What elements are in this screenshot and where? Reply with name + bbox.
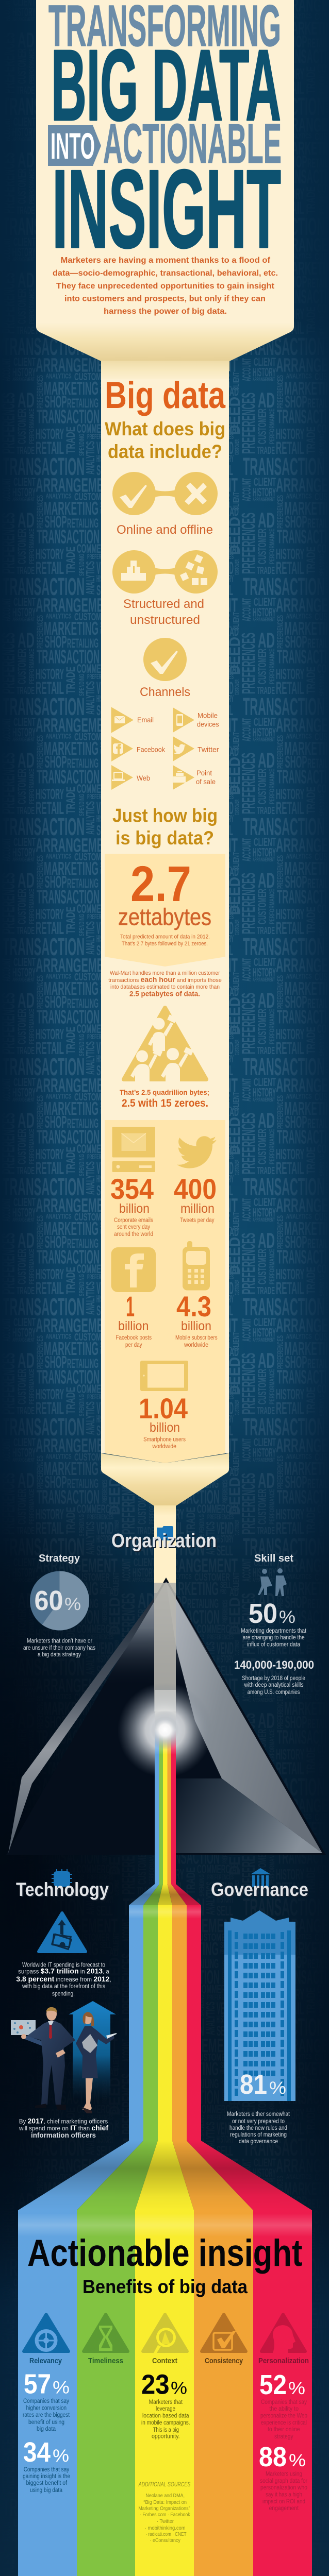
stat: 354 billion: Corporate emails <box>114 1217 153 1224</box>
heading: what does big data include <box>105 418 225 462</box>
prism <box>6 1578 326 1855</box>
text: governance: regulations of marketing <box>230 2132 287 2138</box>
icon: building with 81 percent: 81 <box>240 2069 267 2100</box>
icon: structured and unstructured <box>112 550 218 594</box>
stat: 1 billion <box>116 1290 152 1348</box>
panel bottom fold <box>101 1453 229 1512</box>
icon: tablet <box>140 1361 188 1391</box>
label: structured and unstructured: Structured and <box>123 597 204 611</box>
icon: it spending triangle <box>39 1913 86 1952</box>
stat: 354 billion: 354 <box>110 1173 154 1205</box>
panel: cream banner <box>36 0 294 1453</box>
benefit: context: location-based data <box>142 2413 189 2419</box>
heading: what does big data include: data include? <box>108 441 222 462</box>
benefit: personalization: to their online <box>268 2427 300 2433</box>
additional sources: · Twitter <box>157 2519 174 2524</box>
intro text: Marketers are having a moment thanks to a flood of <box>61 256 271 265</box>
benefit: personalization: say it has a high <box>266 2492 302 2498</box>
technology heading: Technology <box>16 1879 109 1900</box>
heading: organization: Organization <box>112 1531 218 1553</box>
benefit: personalization: experience is critical <box>261 2420 307 2426</box>
channel: email <box>111 707 154 733</box>
stat: 1.04 billion: 1.04 <box>139 1392 188 1425</box>
text: wal-mart: transactions each hour and imports those <box>108 975 222 984</box>
channel: mobile devices <box>173 707 219 733</box>
white glow over rainbow start <box>145 1710 185 1750</box>
technology heading <box>16 1869 110 1901</box>
benefit: personalization <box>258 2314 309 2512</box>
benefit: personalization: personalization who <box>260 2485 307 2491</box>
prism glow <box>118 1683 212 1777</box>
benefit: relevancy: Relevancy <box>29 2357 62 2365</box>
additional sources: · eConsultancy <box>150 2538 180 2544</box>
stat: 1 billion: billion <box>118 1319 149 1333</box>
text: it spending <box>16 1962 111 1997</box>
title: INTO <box>51 126 95 167</box>
channel: mobile devices: devices <box>197 720 219 728</box>
skill set section: are changing to handle the <box>243 1635 305 1641</box>
channel: web <box>111 765 150 790</box>
stat: 354 billion <box>110 1173 154 1238</box>
channel: twitter <box>173 736 219 761</box>
stat: 354 billion: billion <box>119 1201 150 1216</box>
benefit: personalization: strategy <box>274 2434 293 2440</box>
benefit: personalization: the ability to <box>269 2406 299 2412</box>
strategy section: Strategy <box>39 1553 80 1564</box>
stat: 400 million: million <box>180 1201 215 1216</box>
channel: web: Web <box>137 774 150 782</box>
strategy section: a big data strategy <box>38 1652 81 1658</box>
benefit: personalization: Companies that say <box>261 2399 307 2405</box>
benefit: relevancy: gaining insight is the <box>23 2473 70 2480</box>
intro text: They face unprecedented opportunities to gain insight <box>56 282 275 291</box>
skill set section: 50 <box>249 1598 277 1629</box>
benefit: context: in mobile campaigns. <box>141 2420 190 2426</box>
benefit: relevancy: higher conversion <box>26 2405 67 2411</box>
channel: point of sale: Point <box>196 769 212 777</box>
benefit: context <box>141 2314 190 2440</box>
benefit: relevancy: using big data <box>30 2487 63 2494</box>
skill set section: Marketing departments that <box>241 1628 307 1634</box>
intro text: into customers and prospects, but only if they can <box>64 295 266 303</box>
stat box: 2.7 zettabytes: Total predicted amount of data in 2012. <box>120 934 210 940</box>
channel: twitter: Twitter <box>198 745 219 754</box>
additional sources: “Big Data: Impact on <box>143 2500 187 2505</box>
governance heading <box>211 1868 309 1901</box>
text: it spending: 3.8 percent increase from 2012, <box>16 1975 111 1983</box>
text: governance: or not very prepared to <box>232 2119 285 2125</box>
stat: 400 million: Tweets per day <box>180 1217 215 1224</box>
benefit: context: 23 <box>141 2369 170 2400</box>
benefit: personalization: % <box>289 2451 306 2470</box>
benefit: context: leverage <box>156 2406 175 2412</box>
icon: twitter bird <box>177 1136 217 1168</box>
stat: 1 billion: per day <box>125 1342 142 1348</box>
heading: big data: Big data <box>105 375 226 416</box>
icon: online and offline <box>112 472 218 515</box>
benefit: consistency: Consistency <box>205 2357 243 2365</box>
channel: mobile devices: Mobile <box>198 711 218 719</box>
icon: pyramid of people <box>124 1008 206 1081</box>
skill set section: 140,000-190,000 <box>234 1658 314 1671</box>
benefit: relevancy: Companies that say <box>24 2467 70 2473</box>
benefit: context: Context <box>152 2357 177 2365</box>
heading: what does big data include: What does big <box>105 418 225 439</box>
skill set section: among U.S. companies <box>248 1689 300 1696</box>
stat: 1.04 billion: Smartphone users <box>143 1436 186 1443</box>
governance heading: Governance <box>211 1879 308 1900</box>
label: channels: Channels <box>140 685 190 699</box>
skill set section: with deep analytical skills <box>244 1682 304 1688</box>
additional sources: ADDITIONAL SOURCES <box>138 2482 191 2488</box>
benefit: personalization: Marketers using <box>266 2471 302 2478</box>
benefit: relevancy: benefit of using <box>28 2419 64 2426</box>
stat: 4.3 billion: Mobile subscribers <box>175 1335 218 1341</box>
benefit: relevancy: 34 <box>23 2437 51 2468</box>
benefit: personalization: 52 <box>259 2369 287 2400</box>
strategy section: are unsure if their company has <box>23 1645 95 1651</box>
text: wal-mart: Wal-Mart handles more than a million customer <box>110 970 220 976</box>
additional sources: · mobithinking.com <box>145 2526 186 2531</box>
benefit: context: This is a big <box>153 2427 179 2433</box>
stat box: 2.7 zettabytes: zettabytes <box>118 904 211 930</box>
intro text <box>53 256 278 316</box>
benefit: context: Marketers that <box>149 2399 183 2405</box>
label: structured and unstructured: unstructured <box>130 613 200 627</box>
light beam strip <box>154 1505 176 1593</box>
stat: 1.04 billion: billion <box>150 1420 180 1435</box>
text: it spending: surpass $3.7 trillion in 2013, a <box>18 1967 109 1975</box>
text: wal-mart: into databases estimated to contain more than <box>110 984 220 990</box>
additional sources <box>138 2482 191 2544</box>
text: wal-mart <box>108 970 222 997</box>
channel: point of sale <box>173 765 216 790</box>
stat: 4.3 billion: 4.3 <box>176 1290 211 1323</box>
benefit: relevancy: % <box>53 2446 69 2466</box>
stat: 1 billion: 1 <box>126 1290 135 1323</box>
benefit: relevancy: Companies that say <box>23 2398 69 2404</box>
governance heading: Governance <box>212 1880 309 1901</box>
benefit: context: opportunity. <box>152 2434 180 2440</box>
strategy section: 60 <box>34 1585 63 1616</box>
text: governance <box>227 2111 290 2145</box>
stat: 354 billion: sent every day <box>117 1224 150 1230</box>
text: it spending: Worldwide IT spending is forecast to <box>22 1962 105 1969</box>
text: chief marketing officers: will spend more on IT than chief <box>19 2124 108 2132</box>
additional sources: · Forbes.com · Facebook <box>140 2512 190 2518</box>
additional sources: · radicati.com · CNET <box>145 2532 187 2537</box>
benefit: context: % <box>171 2378 187 2398</box>
stat: 400 million: 400 <box>174 1173 217 1205</box>
icon: channels check <box>143 638 187 681</box>
skill set section: % <box>279 1607 295 1627</box>
text: chief marketing officers: By 2017, chief marketing officers <box>19 2117 108 2125</box>
text: chief marketing officers <box>19 2117 108 2139</box>
benefit: personalization: engagement <box>269 2505 299 2512</box>
intro text: harness the power of big data. <box>104 307 227 316</box>
panel: stat box <box>105 1120 225 1463</box>
channel: facebook: Facebook <box>137 745 166 754</box>
stat box: 2.7 zettabytes: 2.7 <box>130 856 191 912</box>
skill set section <box>234 1553 314 1696</box>
illustration: executives with up arrow <box>11 2001 117 2113</box>
stat: 400 million <box>174 1173 217 1224</box>
stat: 4.3 billion <box>175 1290 218 1348</box>
skill set section: Shortage by 2018 of people <box>242 1675 305 1682</box>
icon: building with 81 percent <box>224 1910 295 2101</box>
heading: organization: Organization <box>111 1530 217 1552</box>
benefit: relevancy: % <box>53 2378 70 2398</box>
title <box>48 0 282 271</box>
benefit: personalization: social graph data for <box>260 2478 307 2484</box>
strategy section <box>23 1553 95 1658</box>
benefit: personalization: Personalization <box>258 2357 309 2365</box>
benefit: personalization: 88 <box>259 2442 287 2472</box>
channel: facebook <box>111 736 166 761</box>
text: it spending: with big data at the forefront of this <box>22 1984 105 1990</box>
stat: 4.3 billion: worldwide <box>184 1342 208 1348</box>
label: structured and unstructured <box>123 597 204 627</box>
benefit: relevancy: biggest benefit of <box>26 2480 68 2486</box>
benefit: personalization: % <box>288 2379 305 2398</box>
benefit: personalization: personalize the Web <box>260 2413 307 2419</box>
icon: email computer <box>112 1127 155 1172</box>
strategy section: % <box>64 1595 81 1614</box>
heading: just how big: is big data? <box>116 827 214 849</box>
text: 2.5 quadrillion bytes <box>120 1088 209 1109</box>
text: it spending: spending. <box>52 1991 75 1997</box>
benefit: timeliness: Timeliness <box>88 2357 123 2365</box>
heading: just how big <box>112 805 218 849</box>
heading: just how big: Just how big <box>112 805 218 826</box>
stat: 1.04 billion: worldwide <box>152 1444 176 1450</box>
icon: mobile phone <box>183 1241 210 1290</box>
benefit: relevancy <box>23 2314 70 2494</box>
benefit: personalization: impact on ROI and <box>262 2499 305 2505</box>
strategy section: Marketers that don’t have or <box>27 1638 92 1645</box>
technology heading: Technology <box>17 1880 110 1901</box>
heading: benefits of big data: Benefits of big data <box>83 2276 248 2297</box>
skill set section: influx of customer data <box>247 1641 301 1648</box>
text: 2.5 quadrillion bytes: 2.5 with 15 zeroes. <box>122 1097 208 1109</box>
channel: point of sale: of sale <box>196 777 216 786</box>
text: governance: data governance <box>239 2139 278 2145</box>
text: chief marketing officers: information officers <box>31 2131 96 2139</box>
stat: 354 billion: around the world <box>114 1231 153 1238</box>
stat: 4.3 billion: billion <box>181 1319 211 1333</box>
text: wal-mart: 2.5 petabytes of data. <box>129 989 200 997</box>
intro text: data—socio-demographic, transactional, behavioral, etc. <box>53 269 278 278</box>
benefit: relevancy: big data <box>37 2426 56 2432</box>
channel: email: Email <box>137 716 154 724</box>
text: governance: handle the new rules and <box>229 2125 287 2131</box>
label: online and offline: Online and offline <box>117 523 213 537</box>
text: 2.5 quadrillion bytes: That’s 2.5 quadrillion bytes; <box>120 1088 209 1096</box>
icon: facebook <box>111 1247 156 1292</box>
additional sources: Neolane and DMA, <box>145 2493 185 2499</box>
stat box: 2.7 zettabytes: That's 2.7 bytes followed by 21 zeroes. <box>122 941 208 947</box>
rainbow beam <box>18 1729 312 2576</box>
benefit: timeliness <box>84 2314 128 2365</box>
stat box: 2.7 zettabytes <box>105 854 225 967</box>
stat: 1 billion: Facebook posts <box>116 1335 152 1341</box>
skill set section: Skill set <box>254 1553 293 1564</box>
stat: 1.04 billion <box>139 1392 188 1450</box>
benefit: consistency <box>202 2314 246 2365</box>
benefit: relevancy: 57 <box>24 2369 51 2400</box>
text: governance: Marketers either somewhat <box>227 2111 290 2117</box>
icon: building with 81 percent: % <box>269 2078 286 2098</box>
additional sources: Marketing Organizations” <box>138 2506 190 2512</box>
benefit: relevancy: rates are the biggest <box>23 2412 70 2418</box>
